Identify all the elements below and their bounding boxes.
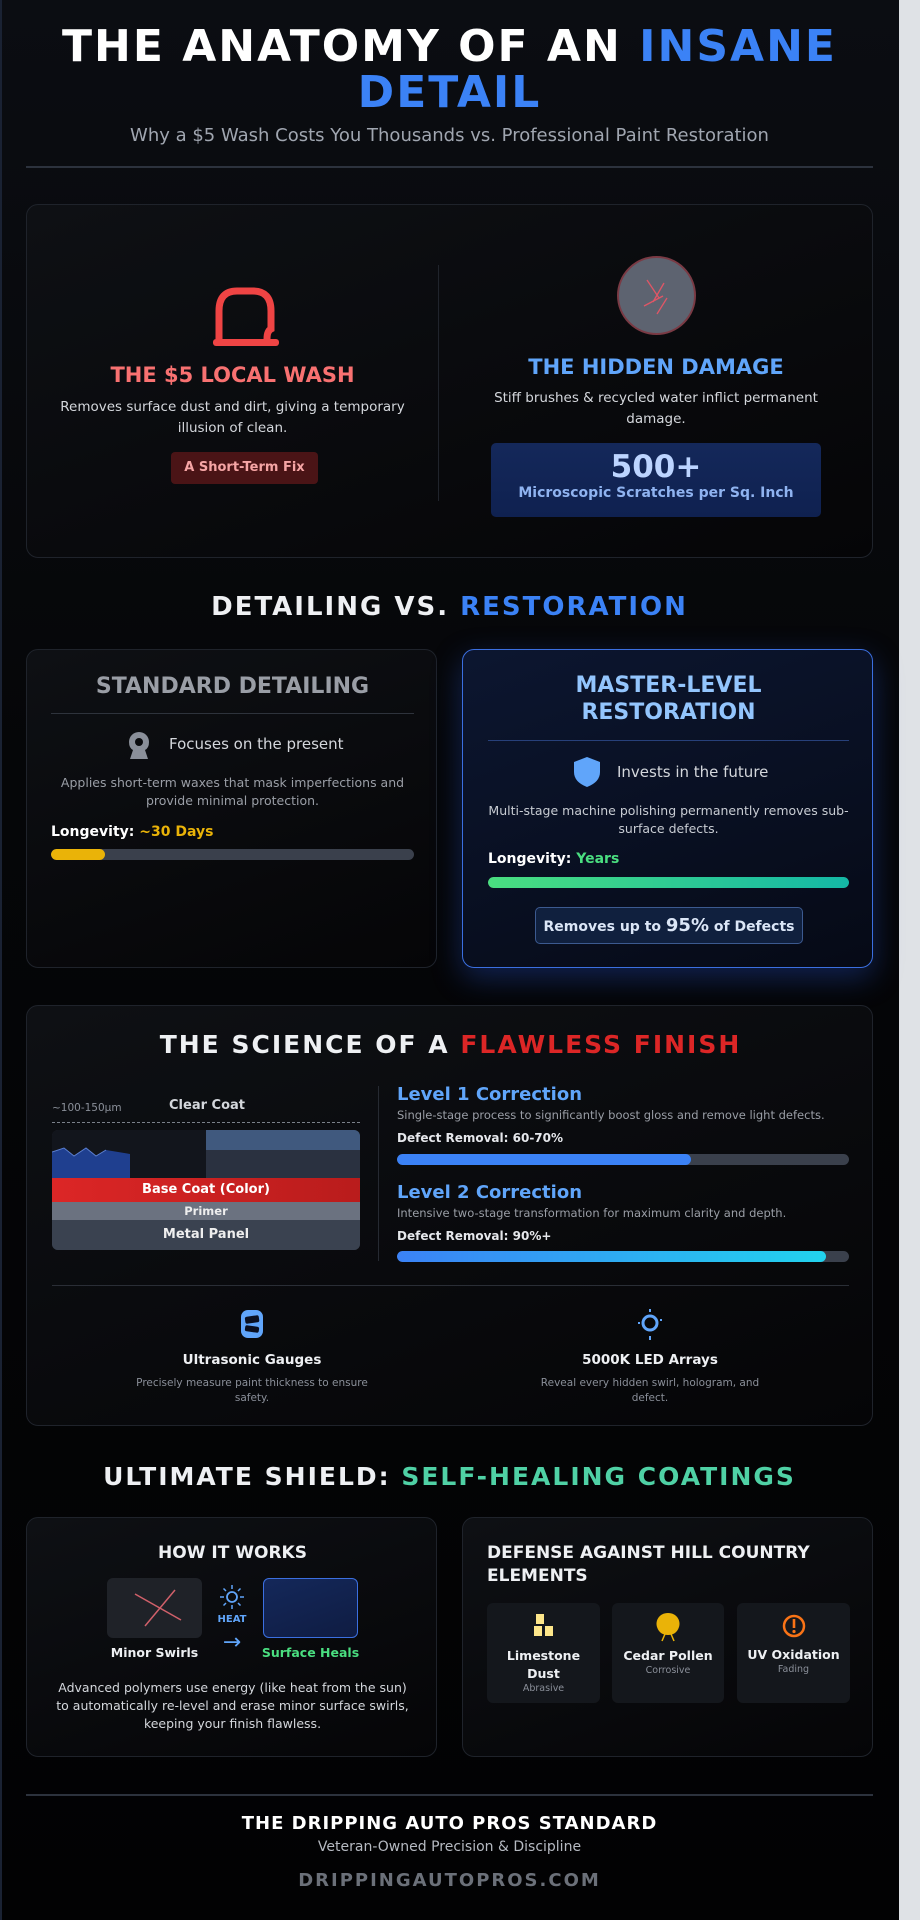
text: polymers description: Advanced polymers use energy (like heat from the sun) to automatically re-level and erase minor surface swirls, keeping your finish flawless.: [56, 1680, 409, 1731]
heading: hidden damage: THE HIDDEN DAMAGE: [528, 355, 784, 379]
text: wash description: Removes surface dust and dirt, giving a temporary illusion of clean.: [60, 399, 405, 436]
level 1 correction: Single-stage process to significantly boost gloss and remove light defects.: [397, 1108, 825, 1122]
tile: limestone dust: Limestone: [507, 1648, 580, 1663]
tool: ultrasonic gauges: Ultrasonic Gauges: [183, 1352, 321, 1368]
icon row: invests in future: Invests in the future: [617, 763, 768, 781]
panel: how it works: [26, 1517, 437, 1757]
badge: short-term fix: [171, 452, 318, 484]
illustration: minor swirls box: [107, 1578, 202, 1638]
title: [62, 21, 837, 118]
text: damage description: Stiff brushes & recycled water inflict permanent damage.: [494, 390, 818, 427]
diagram: paint layers: ~100-150µm: [52, 1102, 122, 1114]
tile: uv oxidation: UV Oxidation: [747, 1647, 840, 1662]
panel: defense against elements: DEFENSE AGAINST HILL COUNTRY ELEMENTS: [487, 1543, 810, 1586]
tile: uv oxidation: Fading: [778, 1664, 809, 1675]
panel: science of flawless finish: [26, 1005, 873, 1426]
stat: 500+ scratches: 500+: [611, 449, 701, 485]
label: minor swirls: Minor Swirls: [111, 1645, 198, 1660]
tool: ultrasonic gauges: [136, 1310, 368, 1404]
icon: scratched paint circle: [617, 256, 696, 335]
level 1 correction: [397, 1084, 849, 1165]
icon: heat sun: [218, 1585, 246, 1625]
tool: led arrays: 5000K LED Arrays: [582, 1352, 718, 1368]
level 2 correction: Intensive two-stage transformation for maximum clarity and depth.: [397, 1206, 786, 1220]
diagram: paint layers: [52, 1098, 360, 1250]
illustration: healed surface box: [263, 1578, 358, 1638]
panel: defense against elements: [462, 1517, 873, 1757]
badge: 95% defects: Removes up to 95% of Defects: [544, 915, 794, 936]
panel: how it works: HOW IT WORKS: [158, 1543, 307, 1563]
icon: heat sun: HEAT: [218, 1614, 246, 1625]
tool: led arrays: [541, 1309, 759, 1404]
heading: science: THE SCIENCE OF A FLAWLESS FINISH: [160, 1030, 741, 1059]
footer: website: DRIPPINGAUTOPROS.COM: [298, 1870, 601, 1891]
tile: uv oxidation: [737, 1603, 850, 1703]
panel: master-level restoration: [462, 649, 873, 968]
level 2 correction: Level 2 Correction: [397, 1182, 582, 1203]
title: THE ANATOMY OF AN INSANE: [62, 21, 837, 72]
tile: limestone dust: [487, 1603, 600, 1703]
tile: cedar pollen: Cedar Pollen: [623, 1648, 713, 1663]
longevity: years: Longevity: Years: [488, 851, 619, 867]
tool: led arrays: Reveal every hidden swirl, hologram, and defect.: [541, 1377, 759, 1404]
diagram: paint layers: Metal Panel: [163, 1227, 249, 1242]
diagram: paint layers: Base Coat (Color): [142, 1182, 270, 1197]
level 2 correction: Defect Removal: 90%+: [397, 1229, 551, 1243]
title: DETAIL: [358, 67, 541, 118]
panel: master-level restoration: RESTORATION: [581, 700, 756, 725]
level 1 correction: Defect Removal: 60-70%: [397, 1131, 563, 1145]
icon: car wash: [213, 288, 279, 346]
text: standard description: Applies short-term waxes that mask imperfections and provide minimal protection.: [61, 775, 404, 808]
badge: short-term fix: A Short-Term Fix: [184, 460, 305, 475]
panel: standard detailing: STANDARD DETAILING: [96, 674, 369, 699]
badge: 95% defects: [535, 907, 803, 944]
label: surface heals: Surface Heals: [262, 1645, 359, 1660]
stat: 500+ scratches: Microscopic Scratches per Sq. Inch: [518, 485, 794, 501]
icon row: focuses on present: Focuses on the present: [169, 735, 344, 753]
longevity: 30 days: Longevity: ~30 Days: [51, 824, 213, 840]
arrow: to heal: →: [223, 1630, 241, 1655]
heading: ultimate shield: ULTIMATE SHIELD: SELF-HEALING COATINGS: [103, 1462, 796, 1491]
stat: 500+ scratches: [491, 443, 821, 517]
level 1 correction: Level 1 Correction: [397, 1084, 582, 1105]
tile: cedar pollen: Corrosive: [646, 1665, 690, 1676]
panel: wash vs damage: [26, 204, 873, 558]
heading: $5 local wash: THE $5 LOCAL WASH: [110, 363, 355, 387]
icon row: focuses on present: [129, 732, 344, 759]
tool: ultrasonic gauges: Precisely measure paint thickness to ensure safety.: [136, 1377, 368, 1404]
tile: limestone dust: Dust: [527, 1666, 560, 1681]
text: restoration description: Multi-stage machine polishing permanently removes sub-surface defects.: [488, 803, 849, 836]
panel: standard detailing: [26, 649, 437, 968]
diagram: paint layers: Clear Coat: [169, 1098, 245, 1113]
diagram: paint layers: Primer: [184, 1204, 228, 1218]
level 2 correction: [397, 1182, 849, 1262]
panel: master-level restoration: MASTER-LEVEL: [576, 673, 762, 698]
tile: limestone dust: Abrasive: [523, 1683, 564, 1694]
subtitle: Why a $5 Wash Costs You Thousands vs. Professional Paint Restoration: [130, 125, 769, 146]
footer: tagline: Veteran-Owned Precision & Discipline: [318, 1839, 581, 1855]
footer: brand standard: THE DRIPPING AUTO PROS STANDARD: [242, 1813, 657, 1834]
heading: detailing vs restoration: DETAILING VS. RESTORATION: [211, 592, 688, 622]
icon row: invests in future: [574, 757, 768, 787]
tile: cedar pollen: [612, 1603, 724, 1703]
